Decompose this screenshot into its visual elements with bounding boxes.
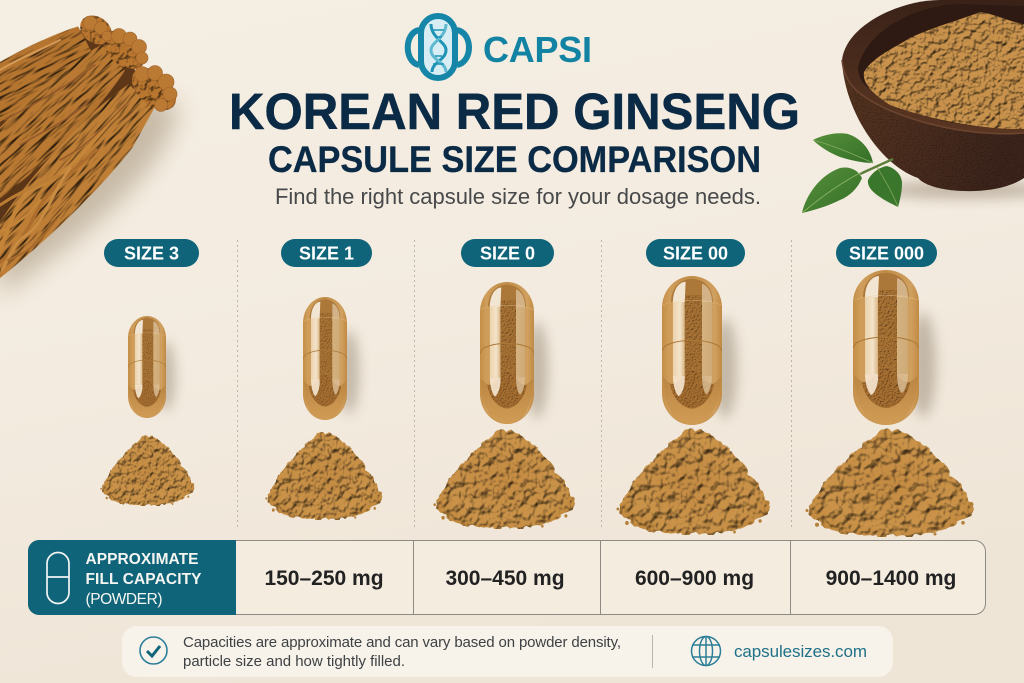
size badge: SIZE 00 [663,244,728,264]
icon: capsule DNA mark [408,16,469,78]
size badge: SIZE 3 [124,244,179,264]
icon: globe [692,636,720,666]
table: fill capacity [28,540,986,615]
column: size 000 [806,239,974,536]
website: capsulesizes.com [734,642,867,661]
size badge [104,239,199,267]
note text: particle size and how tightly filled. [183,653,405,670]
capsule [480,282,534,424]
root crowns [75,10,184,118]
capsule [853,270,919,425]
icon: capsule outline [47,552,69,604]
column: size 00 [616,239,770,534]
value: size 00: 900–1400 mg [826,567,956,590]
capsule [662,276,722,425]
column: size 3 [100,239,199,505]
capsule [128,316,166,418]
powder pile [806,430,974,536]
logo [408,16,592,78]
logo wordmark: CAPSI [483,29,592,70]
powder pile [100,436,194,505]
column: size 1 [265,239,382,519]
tagline: Find the right capsule size for your dosage needs. [275,184,761,209]
powder pile [265,433,382,519]
powder in bowl [864,12,1024,129]
footer note panel [122,626,893,677]
subtitle heading: CAPSULE SIZE COMPARISON [268,139,761,180]
image: ginseng roots [0,10,184,295]
icon: green leaves [802,133,902,213]
image: powder bowl [842,0,1024,199]
row header text: (POWDER) [86,591,162,608]
note text: Capacities are approximate and can vary based on powder density, [183,634,621,651]
powder pile [616,430,770,534]
value: size 0: 600–900 mg [635,567,754,590]
row header text: APPROXIMATE [86,551,198,568]
size badge [461,239,554,267]
value: size 1: 300–450 mg [445,567,565,590]
row header text: FILL CAPACITY [86,571,202,588]
icon: check circle [140,637,167,664]
powder pile [433,431,575,528]
size badge [836,239,937,267]
value: size 3: 150–250 mg [264,567,384,590]
title: KOREAN RED GINSENG [229,83,800,140]
size badge [646,239,745,267]
size badge [281,239,372,267]
size badge: SIZE 000 [849,244,924,264]
capsule [303,297,347,420]
size badge: SIZE 1 [299,244,354,264]
row header [28,540,236,615]
column: size 0 [433,239,575,528]
size badge: SIZE 0 [480,244,535,264]
